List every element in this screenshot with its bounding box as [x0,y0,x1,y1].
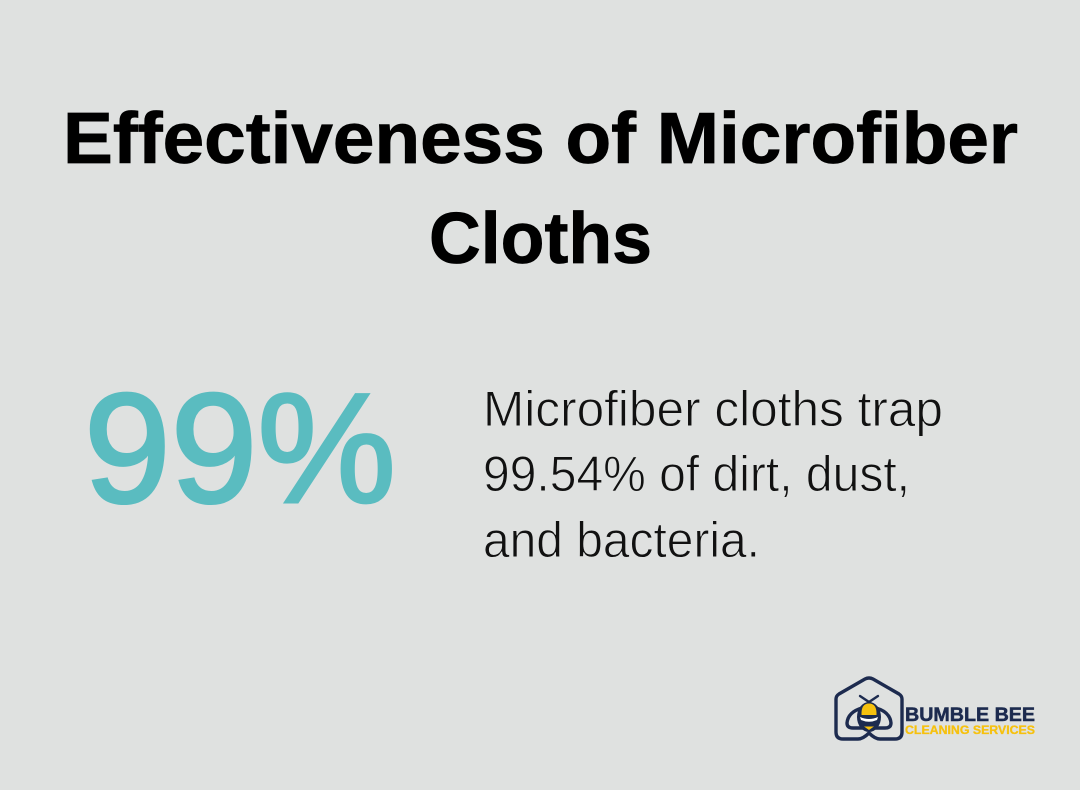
big statistic: 99%: 99% [84,362,396,536]
logo tagline: CLEANING SERVICES [905,725,1035,737]
title: Effectiveness of Microfiber [63,99,1018,179]
description text: Microfiber cloths trap [483,381,943,437]
title [63,99,1018,279]
description text [483,381,943,568]
description text: 99.54% of dirt, dust, [483,446,910,502]
icon: bee [847,696,891,732]
description text: and bacteria. [483,512,760,568]
logo: Bumble Bee Cleaning Services [836,678,1035,739]
logo wordmark: BUMBLE BEE [905,704,1035,726]
icon: house outline [836,678,902,739]
title: Cloths [429,199,652,279]
